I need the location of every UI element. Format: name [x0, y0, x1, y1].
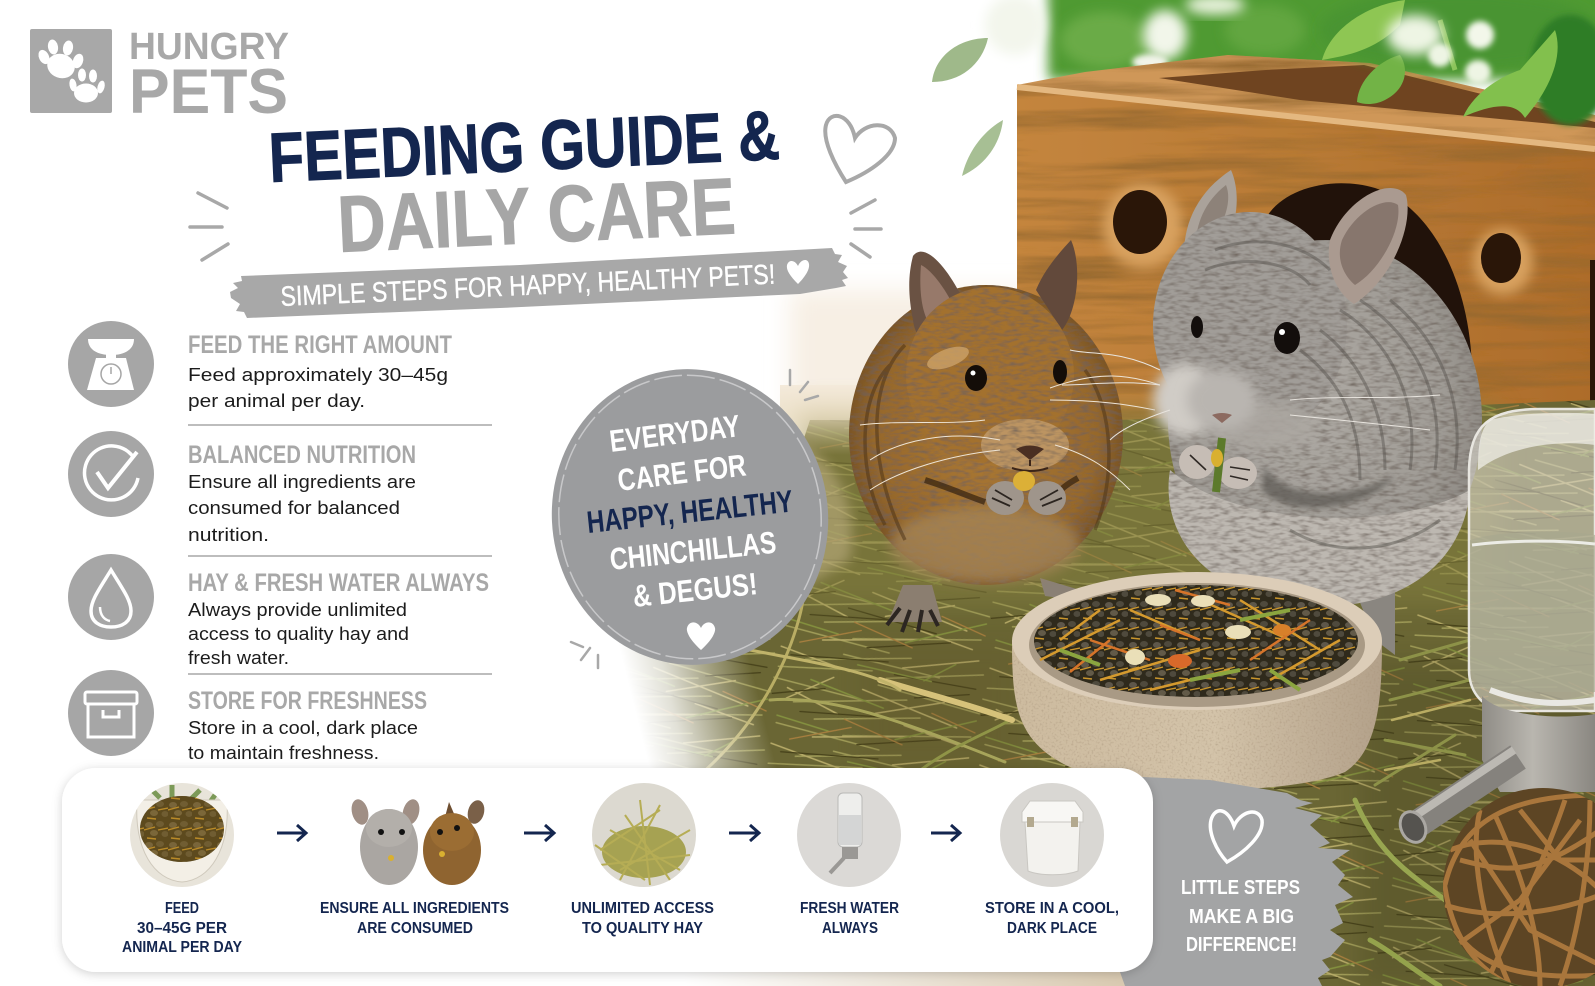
title [267, 96, 781, 269]
feature 2: balanced nutrition [68, 431, 416, 545]
round callout badge: EVERYDAY [608, 408, 742, 459]
arrow [277, 825, 306, 841]
thumbnail: food bowl [130, 783, 234, 887]
background foliage [932, 0, 1595, 176]
icon: white heart [687, 622, 715, 650]
step 4: fresh water: FRESH WATER [800, 900, 899, 917]
brush panel: little steps: MAKE A BIG [1189, 906, 1294, 928]
feature 2: balanced nutrition: Ensure all ingredients are [188, 472, 416, 492]
step 3: unlimited hay: UNLIMITED ACCESS [571, 900, 714, 917]
feature 1: feed the right amount: FEED THE RIGHT AMOUNT [188, 331, 452, 359]
step 2: ensure all consumed: ENSURE ALL INGREDIENTS [320, 900, 509, 917]
logo: Hungry Pets [30, 26, 289, 127]
logo square with paws [30, 29, 112, 113]
badge spark lines [571, 370, 818, 668]
feature 4: store for freshness: Store in a cool, dark place [188, 718, 418, 738]
title: FEEDING GUIDE & [267, 96, 781, 197]
feature 2: balanced nutrition: consumed for balanced [188, 498, 400, 518]
steps panel [62, 768, 1153, 972]
round callout badge: HAPPY, HEALTHY [585, 483, 795, 540]
feature 4: store for freshness: to maintain freshness. [188, 743, 379, 763]
feature 1: feed the right amount [68, 321, 452, 411]
step 5: store: STORE IN A COOL, [985, 900, 1119, 917]
icon: storage box [68, 670, 154, 756]
thumbnail: chinchilla and degu [349, 797, 487, 885]
step 5: store [985, 783, 1119, 937]
step 3: unlimited hay: TO QUALITY HAY [582, 920, 703, 937]
thumbnail: hay pile [592, 783, 696, 887]
step 1: feed: 30–45G PER [137, 920, 227, 937]
hay bed [560, 385, 1595, 986]
feature 2: balanced nutrition: nutrition. [188, 525, 269, 545]
step 4: fresh water: ALWAYS [822, 920, 878, 937]
step 1: feed: FEED [165, 900, 199, 917]
thumbnail: storage tub [1000, 783, 1104, 887]
food bowl [1012, 572, 1382, 790]
icon: kitchen scale [68, 321, 154, 407]
thumbnail: water bottle [797, 783, 901, 887]
title spark lines [190, 193, 881, 260]
icon: outline heart near title [825, 116, 895, 182]
feature 4: store for freshness: STORE FOR FRESHNESS [188, 687, 427, 715]
feature 3: hay and fresh water: Always provide unlimited [188, 600, 407, 620]
floor backdrop [790, 290, 1595, 440]
wooden hide box [1017, 55, 1595, 420]
feature 3: hay and fresh water: access to quality hay and [188, 624, 409, 644]
step 2: ensure all consumed [320, 797, 509, 937]
bottom strip under steps panel [0, 970, 1140, 986]
foreground leaves over box [1320, 0, 1595, 125]
step 3: unlimited hay [571, 783, 714, 937]
feature 4: store for freshness [68, 670, 427, 763]
feature 2: balanced nutrition: BALANCED NUTRITION [188, 441, 416, 469]
step 1: feed: ANIMAL PER DAY [122, 939, 242, 956]
step 5: store: DARK PLACE [1007, 920, 1097, 937]
logo wordmark [129, 26, 289, 127]
round callout badge: & DEGUS! [631, 566, 759, 614]
icon: water drop [68, 554, 154, 640]
title: DAILY CARE [336, 161, 737, 269]
feature 3: hay and fresh water: fresh water. [188, 648, 289, 668]
step 2: ensure all consumed: ARE CONSUMED [357, 920, 473, 937]
logo wordmark: PETS [129, 57, 288, 127]
chinchilla [1062, 170, 1482, 655]
brush panel: little steps: DIFFERENCE! [1186, 934, 1297, 956]
brush panel: little steps: LITTLE STEPS [1181, 877, 1300, 899]
round callout badge: CARE FOR [616, 447, 748, 498]
water bottle [1395, 409, 1595, 847]
arrow [524, 825, 554, 841]
step 4: fresh water [797, 783, 901, 937]
round callout badge: CHINCHILLAS [608, 525, 778, 577]
degu [849, 240, 1160, 632]
wicker ball [1443, 788, 1595, 986]
feature 1: feed the right amount: per animal per day. [188, 391, 365, 411]
subtitle brush banner: SIMPLE STEPS FOR HAPPY, HEALTHY PETS! [280, 259, 776, 312]
feature 3: hay and fresh water [68, 554, 489, 668]
icon: outline heart [1210, 811, 1262, 862]
icon: check circle [68, 431, 154, 517]
logo wordmark: HUNGRY [129, 26, 289, 68]
step 1: feed [122, 783, 242, 956]
feature 1: feed the right amount: Feed approximately 30–45g [188, 365, 448, 385]
feature 3: hay and fresh water: HAY & FRESH WATER ALWAYS [188, 569, 489, 597]
icon: white heart [787, 260, 809, 284]
brush panel: little steps [1120, 776, 1353, 986]
arrow [729, 825, 759, 841]
round callout badge [533, 351, 847, 683]
arrow [931, 825, 960, 841]
